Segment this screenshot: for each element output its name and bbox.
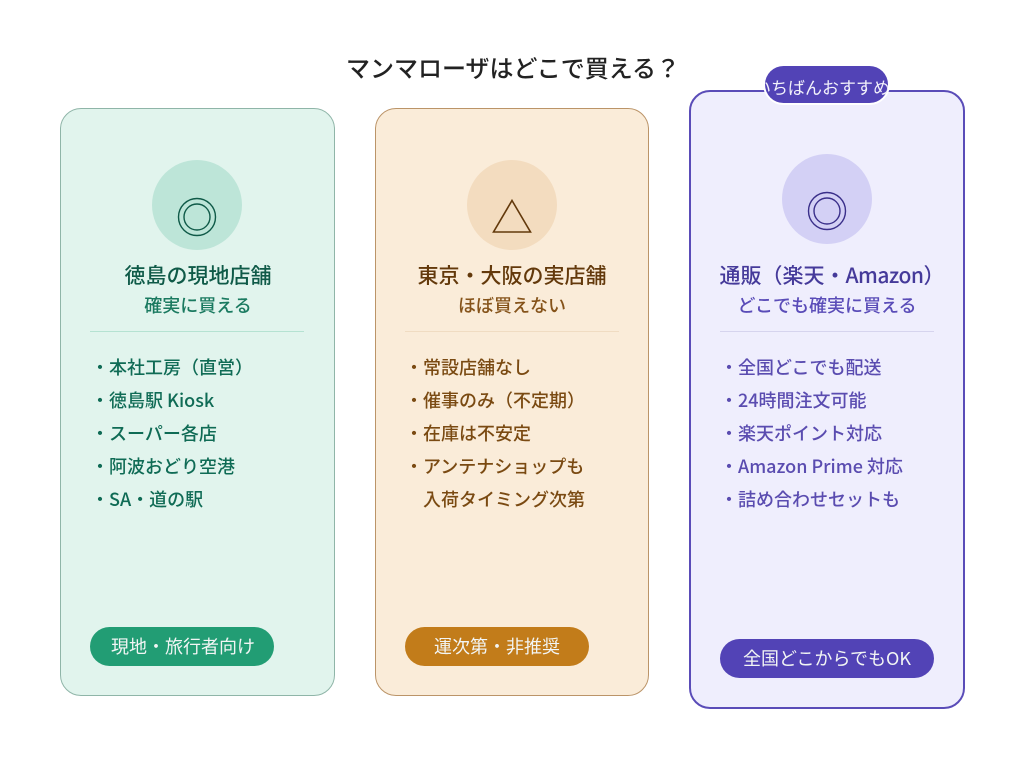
subheading: どこでも確実に買える xyxy=(738,292,916,318)
list: ・楽天ポイント対応 xyxy=(720,420,882,446)
title: マンマローザはどこで買える？ xyxy=(346,49,680,84)
panel: mail order xyxy=(689,90,965,709)
badge xyxy=(405,627,589,666)
list: ・24時間注文可能 xyxy=(720,387,867,413)
panel: Tokyo / Osaka stores xyxy=(375,108,649,696)
subheading: ほぼ買えない xyxy=(458,292,566,318)
badge: 運次第・非推奨 xyxy=(434,633,560,659)
list: 入荷タイミング次第 xyxy=(423,486,585,512)
icon: triangle xyxy=(467,160,557,250)
list: ・スーパー各店 xyxy=(91,420,217,446)
badge: 現地・旅行者向け xyxy=(111,633,255,659)
icon: double circle xyxy=(152,160,242,250)
list: ・徳島駅 Kiosk xyxy=(91,387,214,413)
heading: 徳島の現地店舗 xyxy=(124,260,272,290)
list: ・阿波おどり空港 xyxy=(91,453,235,479)
badge: 全国どこからでもOK xyxy=(743,645,911,671)
recommended tag xyxy=(763,64,890,105)
list xyxy=(405,354,585,512)
list: ・常設店舗なし xyxy=(405,354,531,380)
list: ・在庫は不安定 xyxy=(405,420,531,446)
list xyxy=(720,354,903,512)
subheading: 確実に買える xyxy=(144,292,252,318)
list: ・本社工房（直営） xyxy=(91,354,253,380)
badge xyxy=(90,627,274,666)
heading: 東京・大阪の実店舗 xyxy=(418,260,606,290)
icon: double circle xyxy=(782,154,872,244)
list: ・詰め合わせセットも xyxy=(720,486,900,512)
list: ・Amazon Prime 対応 xyxy=(720,453,903,479)
list xyxy=(91,354,253,512)
list: ・催事のみ（不定期） xyxy=(405,387,585,413)
list: ・SA・道の駅 xyxy=(91,486,203,512)
panel: Tokushima local stores xyxy=(60,108,335,696)
list: ・アンテナショップも xyxy=(405,453,584,479)
list: ・全国どこでも配送 xyxy=(720,354,881,380)
heading: 通販（楽天・Amazon） xyxy=(719,260,945,290)
badge xyxy=(720,639,934,678)
